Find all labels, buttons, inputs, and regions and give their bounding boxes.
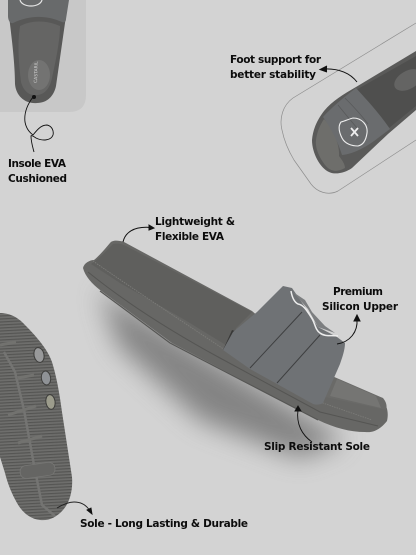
text: lightweight: Flexible EVA [155,231,225,243]
icon: insole slipper: CASTARIL [33,61,40,83]
icon: insole slipper [8,0,69,103]
arrow: lightweight [123,225,154,242]
arrow: insole squiggle [25,97,53,152]
icon: sole studs [33,347,56,410]
icon: angled slipper [312,51,416,173]
icon: logo badge [339,118,367,146]
text: foot support [230,54,322,81]
text: premium upper [322,286,399,313]
shadow: main slipper [100,290,345,458]
icon: main slipper [83,241,388,432]
arrow: sole [57,502,92,514]
text: foot support: Foot support for [230,54,322,66]
text: premium upper: Silicon Upper [322,301,399,313]
panel: insole backdrop [0,0,86,112]
text: premium upper: Premium [333,286,383,298]
text: insole label [8,158,67,185]
text: foot support: better stability [230,69,316,81]
text: insole label: Cushioned [8,173,67,185]
text: slip resistant: Slip Resistant Sole [264,441,370,453]
panel: pill outline [281,23,416,193]
text: lightweight [155,216,235,243]
text: insole label: Insole EVA [8,158,67,170]
text: lightweight: Lightweight & [155,216,235,228]
arrow: slip resistant [295,406,312,442]
arrow: foot support [320,66,357,82]
text: sole: Sole - Long Lasting & Durable [80,518,248,530]
arrow: premium upper [337,315,360,344]
icon: outsole [0,313,72,520]
strap [223,286,345,405]
